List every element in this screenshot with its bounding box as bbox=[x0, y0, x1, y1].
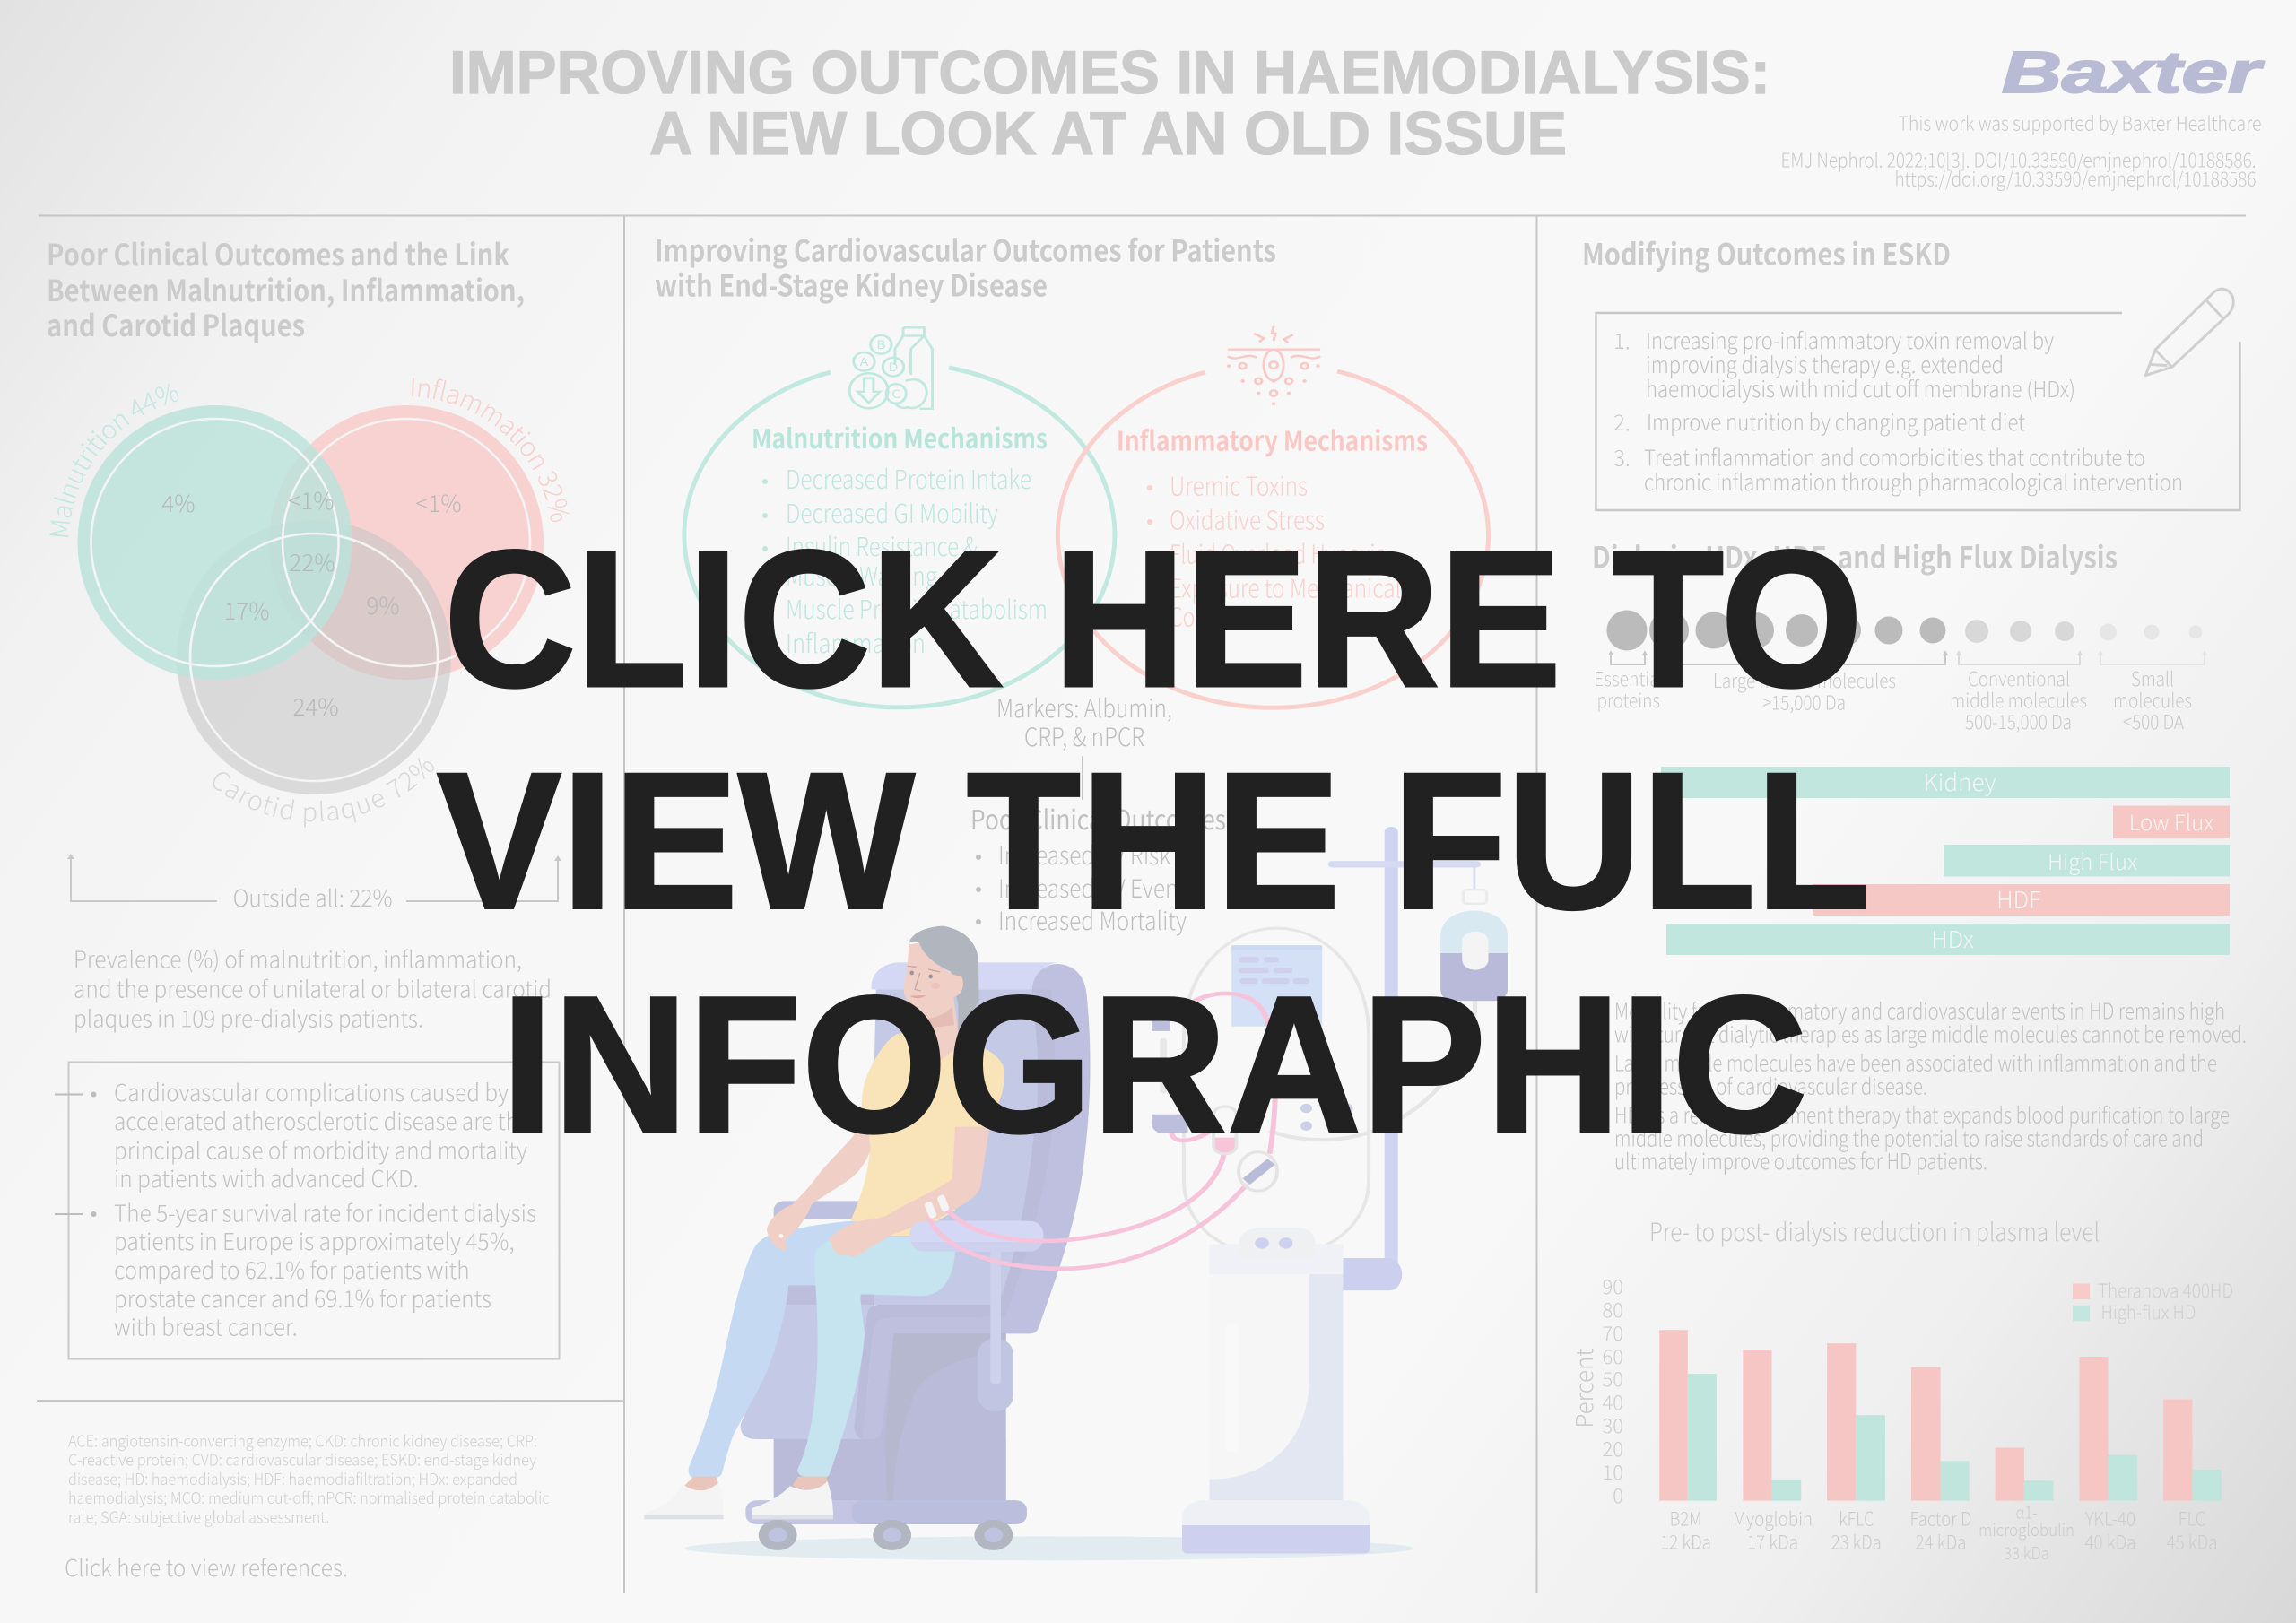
call to action overlay bbox=[437, 510, 1870, 1173]
logo: Baxter: Baxter bbox=[2002, 39, 2265, 105]
icon: inflammation bbox=[1227, 326, 1320, 405]
x axis labels: 45 kDa bbox=[2167, 1529, 2217, 1556]
venn diagram: 24% bbox=[292, 690, 339, 723]
clearance bars: High Flux bbox=[2048, 845, 2137, 876]
abbreviations footnote bbox=[68, 1429, 550, 1529]
references link: Click here to view references. bbox=[65, 1550, 348, 1584]
clearance bars bbox=[1661, 765, 2230, 955]
shoes bbox=[644, 1481, 833, 1519]
molecule size scale: Large middle molecules bbox=[1713, 665, 1896, 694]
poor clinical outcomes list: Increased Mortality bbox=[998, 902, 1187, 938]
x axis labels: 24 kDa bbox=[1916, 1529, 1966, 1556]
y axis: 60 bbox=[1602, 1341, 1623, 1370]
y axis: 90 bbox=[1602, 1271, 1623, 1300]
blood tubes bbox=[928, 994, 1275, 1269]
icon: nutrition: B bbox=[876, 336, 885, 353]
legend: Theranova 400HD bbox=[2098, 1277, 2233, 1304]
venn caption: Prevalence (%) of malnutrition, inflammation, bbox=[74, 942, 522, 976]
outside all label with arrows: Outside all: 22% bbox=[233, 881, 393, 914]
icon: pencil bbox=[2145, 289, 2233, 376]
clearance bars: Low Flux bbox=[2129, 805, 2213, 837]
explanatory text: progression of cardiovascular disease. bbox=[1614, 1071, 1927, 1101]
callout box: cardiovascular complications: patients in Europe is approximately 45%, bbox=[114, 1224, 515, 1257]
list box: Treat inflammation and comorbidities that contribute to bbox=[1644, 441, 2145, 473]
markers: CRP, & nPCR bbox=[1024, 718, 1144, 754]
explanatory text bbox=[1614, 995, 2247, 1176]
x axis labels: microglobulin bbox=[1979, 1517, 2074, 1541]
molecule size scale: Essential bbox=[1594, 664, 1664, 692]
callout box: cardiovascular complications: Cardiovascular complications caused by bbox=[114, 1075, 509, 1108]
heading: poor clinical outcomes: Poor Clinical Outcomes and the Link bbox=[47, 231, 509, 274]
venn diagram: 22% bbox=[289, 545, 335, 578]
teal bars bbox=[1688, 1374, 2222, 1501]
callout box: cardiovascular complications: accelerated atherosclerotic disease are the bbox=[114, 1104, 530, 1137]
list box: 3. bbox=[1613, 441, 1631, 472]
x axis labels: 12 kDa bbox=[1660, 1529, 1711, 1556]
explanatory text: ultimately improve outcomes for HD patients. bbox=[1614, 1145, 1987, 1176]
malnutrition mechanisms: Decreased Protein Intake bbox=[786, 459, 1031, 497]
heading: poor clinical outcomes bbox=[47, 231, 525, 345]
panel: poor clinical outcomes bbox=[47, 231, 570, 1584]
venn diagram: 9% bbox=[366, 588, 400, 621]
callout box: cardiovascular complications: with breast cancer. bbox=[114, 1309, 298, 1343]
malnutrition mechanisms: Muscle Wasting bbox=[786, 556, 937, 594]
clearance bars: HDx bbox=[1931, 922, 1974, 955]
ellipse: inflammation bbox=[1057, 371, 1488, 707]
list box: haemodialysis with mid cut off membrane (HDx) bbox=[1646, 372, 2075, 404]
list box: chronic inflammation through pharmacological intervention bbox=[1644, 465, 2183, 498]
heading: poor clinical outcomes: Between Malnutrition, Inflammation, bbox=[47, 267, 525, 310]
malnutrition mechanisms bbox=[752, 417, 1048, 661]
x axis labels: Myoglobin bbox=[1733, 1506, 1813, 1532]
icon: nutrition: C bbox=[891, 385, 900, 402]
patient bbox=[684, 926, 1004, 1490]
inflammatory mechanisms: Inflammatory Mechanisms bbox=[1117, 420, 1428, 459]
molecule size scale: Small bbox=[2131, 664, 2174, 692]
title bbox=[449, 39, 1770, 168]
list box: 2. bbox=[1613, 405, 1631, 437]
chair bbox=[741, 962, 1091, 1501]
poor clinical outcomes list: Poor Clinical Outcomes bbox=[970, 798, 1226, 838]
molecule size scale: proteins bbox=[1596, 685, 1660, 714]
markers bbox=[996, 690, 1172, 800]
y axis: 50 bbox=[1602, 1364, 1623, 1393]
abbreviations footnote: haemodialysis; MCO: medium cut-off; nPCR: normalised protein catabolic bbox=[68, 1486, 550, 1509]
x axis labels: Factor D bbox=[1910, 1506, 1971, 1532]
right armrest bbox=[909, 1221, 1043, 1411]
heading: improving cardiovascular outcomes: Improving Cardiovascular Outcomes for Patients bbox=[655, 228, 1276, 271]
illustration: patient on dialysis chair with machine bbox=[644, 827, 1508, 1560]
venn diagram: Malnutrition 44% bbox=[49, 384, 179, 537]
callout box: cardiovascular complications: principal cause of morbidity and mortality bbox=[114, 1133, 527, 1166]
dialyzer and drip chamber bbox=[1213, 1107, 1277, 1191]
molecule size scale: Conventional bbox=[1968, 664, 2070, 692]
inflammatory mechanisms: Uremic Toxins bbox=[1170, 466, 1308, 504]
list box: Improve nutrition by changing patient diet bbox=[1647, 405, 2025, 438]
abbreviations footnote: disease; HD: haemodialysis; HDF: haemodiafiltration; HDx: expanded bbox=[68, 1467, 517, 1490]
heading: modifying outcomes: Modifying Outcomes in ESKD bbox=[1582, 231, 1951, 274]
icon: nutrition: A bbox=[860, 353, 868, 370]
floor shadow bbox=[684, 1536, 1413, 1560]
heading: dialysis: Dialysis: HDx, HDF, and High Flux Dialysis bbox=[1592, 534, 2118, 577]
y axis: 80 bbox=[1602, 1295, 1623, 1324]
abbreviations footnote: C-reactive protein; CVD: cardiovascular disease; ESKD: end-stage kidney bbox=[68, 1448, 536, 1471]
y axis: 0 bbox=[1613, 1480, 1623, 1509]
molecule size scale bbox=[1594, 610, 2207, 735]
x axis labels: B2M bbox=[1670, 1506, 1702, 1532]
inflammatory mechanisms: Oxidative Stress bbox=[1170, 500, 1325, 538]
chart title: Pre- to post- dialysis reduction in plasma level bbox=[1649, 1213, 2100, 1249]
y axis: 70 bbox=[1602, 1318, 1623, 1347]
list box: improving dialysis therapy e.g. extended bbox=[1646, 348, 2004, 380]
heading: improving cardiovascular outcomes bbox=[655, 228, 1276, 305]
title: A NEW LOOK AT AN OLD ISSUE bbox=[649, 100, 1567, 168]
x axis labels: kFLC bbox=[1839, 1506, 1874, 1532]
y axis: 20 bbox=[1602, 1434, 1623, 1462]
panel: modifying outcomes in ESKD bbox=[1567, 231, 2247, 1565]
y axis: Percent bbox=[1567, 1348, 1600, 1428]
callout box: cardiovascular complications: prostate cancer and 69.1% for patients bbox=[114, 1281, 491, 1315]
malnutrition mechanisms: Inflammation bbox=[786, 623, 926, 661]
icon: nutrition: D bbox=[889, 359, 898, 376]
clearance bars: Kidney bbox=[1923, 765, 1996, 798]
poor clinical outcomes list bbox=[970, 798, 1226, 938]
footrest and wheels bbox=[745, 1500, 1027, 1550]
poor clinical outcomes list: Increased CV Events bbox=[998, 870, 1196, 906]
molecule size scale: 500-15,000 Da bbox=[1965, 707, 2072, 735]
call to action overlay: INFOGRAPHIC bbox=[501, 956, 1807, 1173]
tube clips bbox=[924, 1194, 950, 1219]
venn caption: plaques in 109 pre-dialysis patients. bbox=[74, 1001, 423, 1035]
callout box: cardiovascular complications: compared to 62.1% for patients with bbox=[114, 1253, 470, 1286]
legend bbox=[2073, 1277, 2233, 1325]
venn diagram bbox=[49, 378, 570, 828]
callout box: cardiovascular complications: The 5-year survival rate for incident dialysis bbox=[114, 1196, 536, 1229]
y axis: 30 bbox=[1602, 1410, 1623, 1439]
inflammatory mechanisms: Exposure to Mechanical bbox=[1170, 568, 1401, 606]
heading: improving cardiovascular outcomes: with End-Stage Kidney Disease bbox=[655, 262, 1048, 305]
venn caption bbox=[74, 942, 552, 1035]
molecule size scale: <500 DA bbox=[2123, 707, 2184, 735]
clearance bars: HDF bbox=[1996, 882, 2041, 916]
venn diagram: <1% bbox=[415, 486, 462, 519]
support and citation bbox=[1781, 108, 2262, 192]
x axis labels: YKL-40 bbox=[2085, 1506, 2135, 1532]
list box: 1. bbox=[1613, 324, 1631, 355]
y axis bbox=[1567, 1271, 1623, 1509]
x axis labels: 40 kDa bbox=[2084, 1529, 2136, 1556]
list box: Increasing pro-inflammatory toxin removal by bbox=[1646, 324, 2054, 356]
x axis labels: 33 kDa bbox=[2004, 1541, 2049, 1565]
callout box: cardiovascular complications bbox=[55, 1062, 560, 1359]
malnutrition mechanisms: Muscle Protein Catabolism bbox=[786, 589, 1048, 627]
dialysis machine bbox=[1152, 827, 1508, 1554]
venn diagram: Carotid plaque 72% bbox=[213, 757, 434, 828]
callout box: cardiovascular complications: in patients with advanced CKD. bbox=[114, 1161, 418, 1194]
molecule size scale: middle molecules bbox=[1950, 685, 2087, 714]
x axis labels: FLC bbox=[2178, 1506, 2206, 1532]
venn diagram: 4% bbox=[161, 486, 196, 519]
y axis: 10 bbox=[1602, 1457, 1623, 1486]
legend: High-flux HD bbox=[2100, 1298, 2196, 1325]
heading: poor clinical outcomes: and Carotid Plaques bbox=[47, 302, 305, 345]
abbreviations footnote: rate; SGA: subjective global assessment. bbox=[68, 1506, 329, 1529]
y axis: 40 bbox=[1602, 1387, 1623, 1416]
pink bars bbox=[1659, 1330, 2192, 1501]
bar chart bbox=[1567, 1271, 2233, 1565]
x axis labels: 23 kDa bbox=[1831, 1529, 1882, 1556]
inflammatory mechanisms: Fluid Overload Hypoxia bbox=[1170, 534, 1387, 572]
ellipse: malnutrition bbox=[684, 368, 1115, 707]
icon: nutrition bbox=[849, 327, 933, 409]
call to action overlay: VIEW THE FULL bbox=[437, 732, 1870, 949]
venn diagram: Inflammation 32% bbox=[412, 378, 570, 522]
malnutrition mechanisms: Malnutrition Mechanisms bbox=[752, 417, 1048, 456]
call to action overlay: CLICK HERE TO bbox=[444, 510, 1863, 727]
poor clinical outcomes list: Increased CV Risk bbox=[998, 837, 1170, 872]
title: IMPROVING OUTCOMES IN HAEMODIALYSIS: bbox=[449, 39, 1770, 107]
molecule size scale: molecules bbox=[2113, 685, 2192, 714]
support and citation: This work was supported by Baxter Healthcare bbox=[1898, 108, 2262, 136]
malnutrition mechanisms: Decreased GI Mobility bbox=[786, 493, 998, 531]
molecule size scale: >15,000 Da bbox=[1762, 687, 1846, 716]
venn diagram: <1% bbox=[288, 483, 335, 516]
abbreviations footnote: ACE: angiotensin-converting enzyme; CKD: chronic kidney disease; CRP: bbox=[68, 1429, 537, 1453]
x axis labels: α1- bbox=[2016, 1500, 2038, 1524]
venn caption: and the presence of unilateral or bilateral carotid bbox=[74, 972, 552, 1005]
list box bbox=[1596, 313, 2240, 510]
outside all label with arrows bbox=[67, 854, 561, 914]
panel: improving cardiovascular outcomes bbox=[644, 228, 1508, 1560]
markers: Markers: Albumin, bbox=[996, 690, 1172, 725]
malnutrition mechanisms: Insulin Resistance & bbox=[786, 526, 978, 564]
inflammatory mechanisms: Components bbox=[1170, 597, 1292, 635]
inflammatory mechanisms bbox=[1117, 420, 1428, 635]
venn diagram: 17% bbox=[223, 594, 270, 627]
x axis labels bbox=[1660, 1500, 2217, 1565]
x axis labels: 17 kDa bbox=[1747, 1529, 1798, 1556]
